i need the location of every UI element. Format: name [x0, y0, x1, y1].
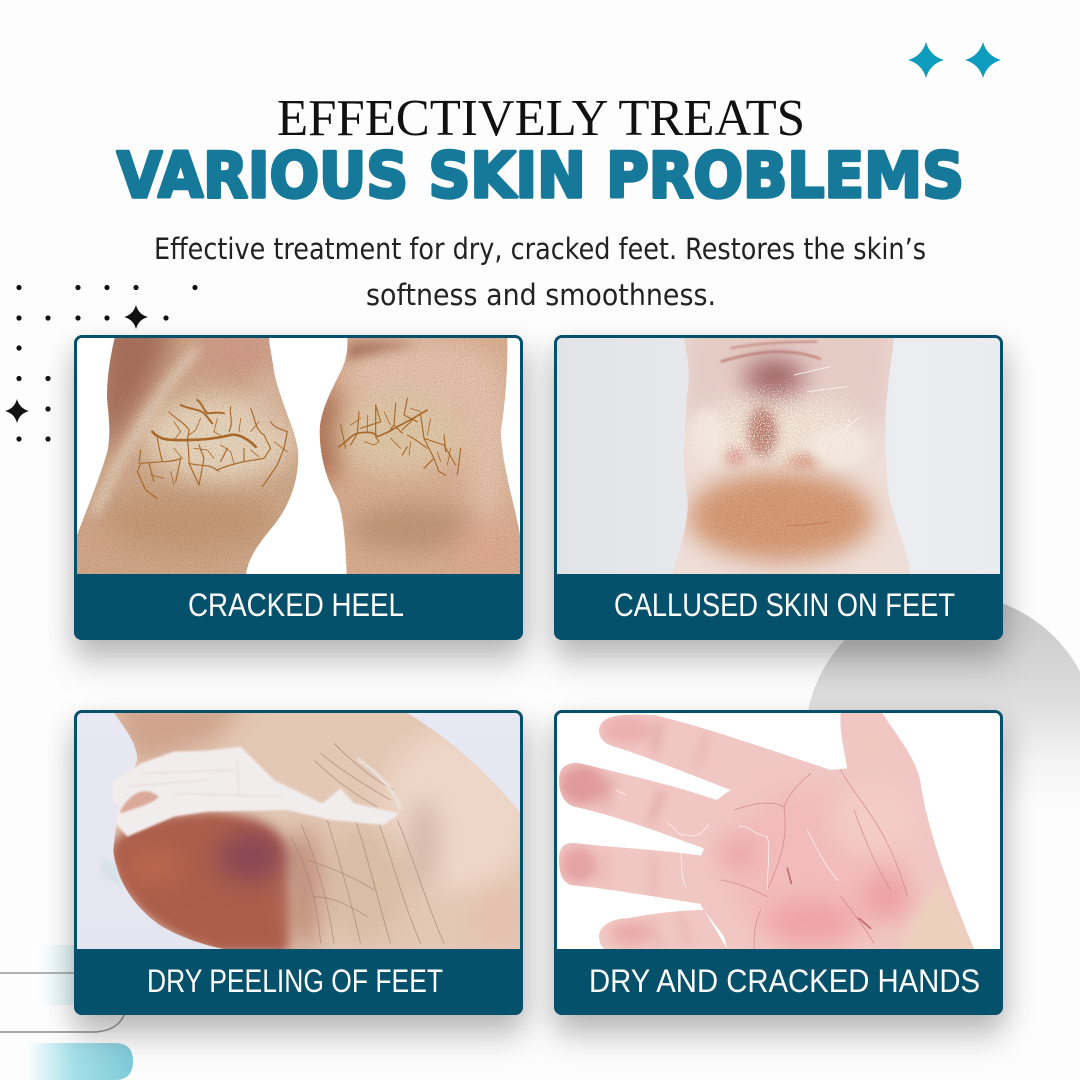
panel: cracked heel	[74, 335, 523, 640]
photo: cracked hand	[557, 713, 1000, 949]
subtitle text	[154, 232, 926, 312]
decoration: dot grid with black sparkles	[5, 284, 198, 442]
photo: callused heel	[557, 338, 1000, 574]
panel: callused skin on feet	[554, 335, 1003, 640]
label band: cracked heel	[74, 574, 523, 640]
photo: two cracked heels	[77, 338, 520, 574]
photo: peeling heel	[77, 713, 520, 949]
panel: dry and cracked hands	[554, 710, 1003, 1015]
title: EFFECTIVELY TREATS	[277, 90, 805, 147]
title	[116, 90, 964, 210]
label band: dry peeling: DRY PEELING OF FEET	[147, 963, 443, 999]
panel: dry peeling of feet	[74, 710, 523, 1015]
subtitle text: softness and smoothness.	[366, 278, 716, 312]
label band: cracked heel: CRACKED HEEL	[188, 587, 404, 623]
title: VARIOUS SKIN PROBLEMS	[117, 139, 964, 210]
subtitle text: Effective treatment for dry, cracked feet. Restores the skin’s	[154, 232, 926, 266]
icon: teal sparkles	[908, 42, 1001, 78]
label band: callused skin: CALLUSED SKIN ON FEET	[614, 587, 955, 623]
label band: callused skin	[554, 574, 1003, 640]
label band: dry peeling	[74, 949, 523, 1015]
label band: dry cracked hands	[554, 949, 1003, 1015]
peeling skin film	[99, 747, 401, 887]
